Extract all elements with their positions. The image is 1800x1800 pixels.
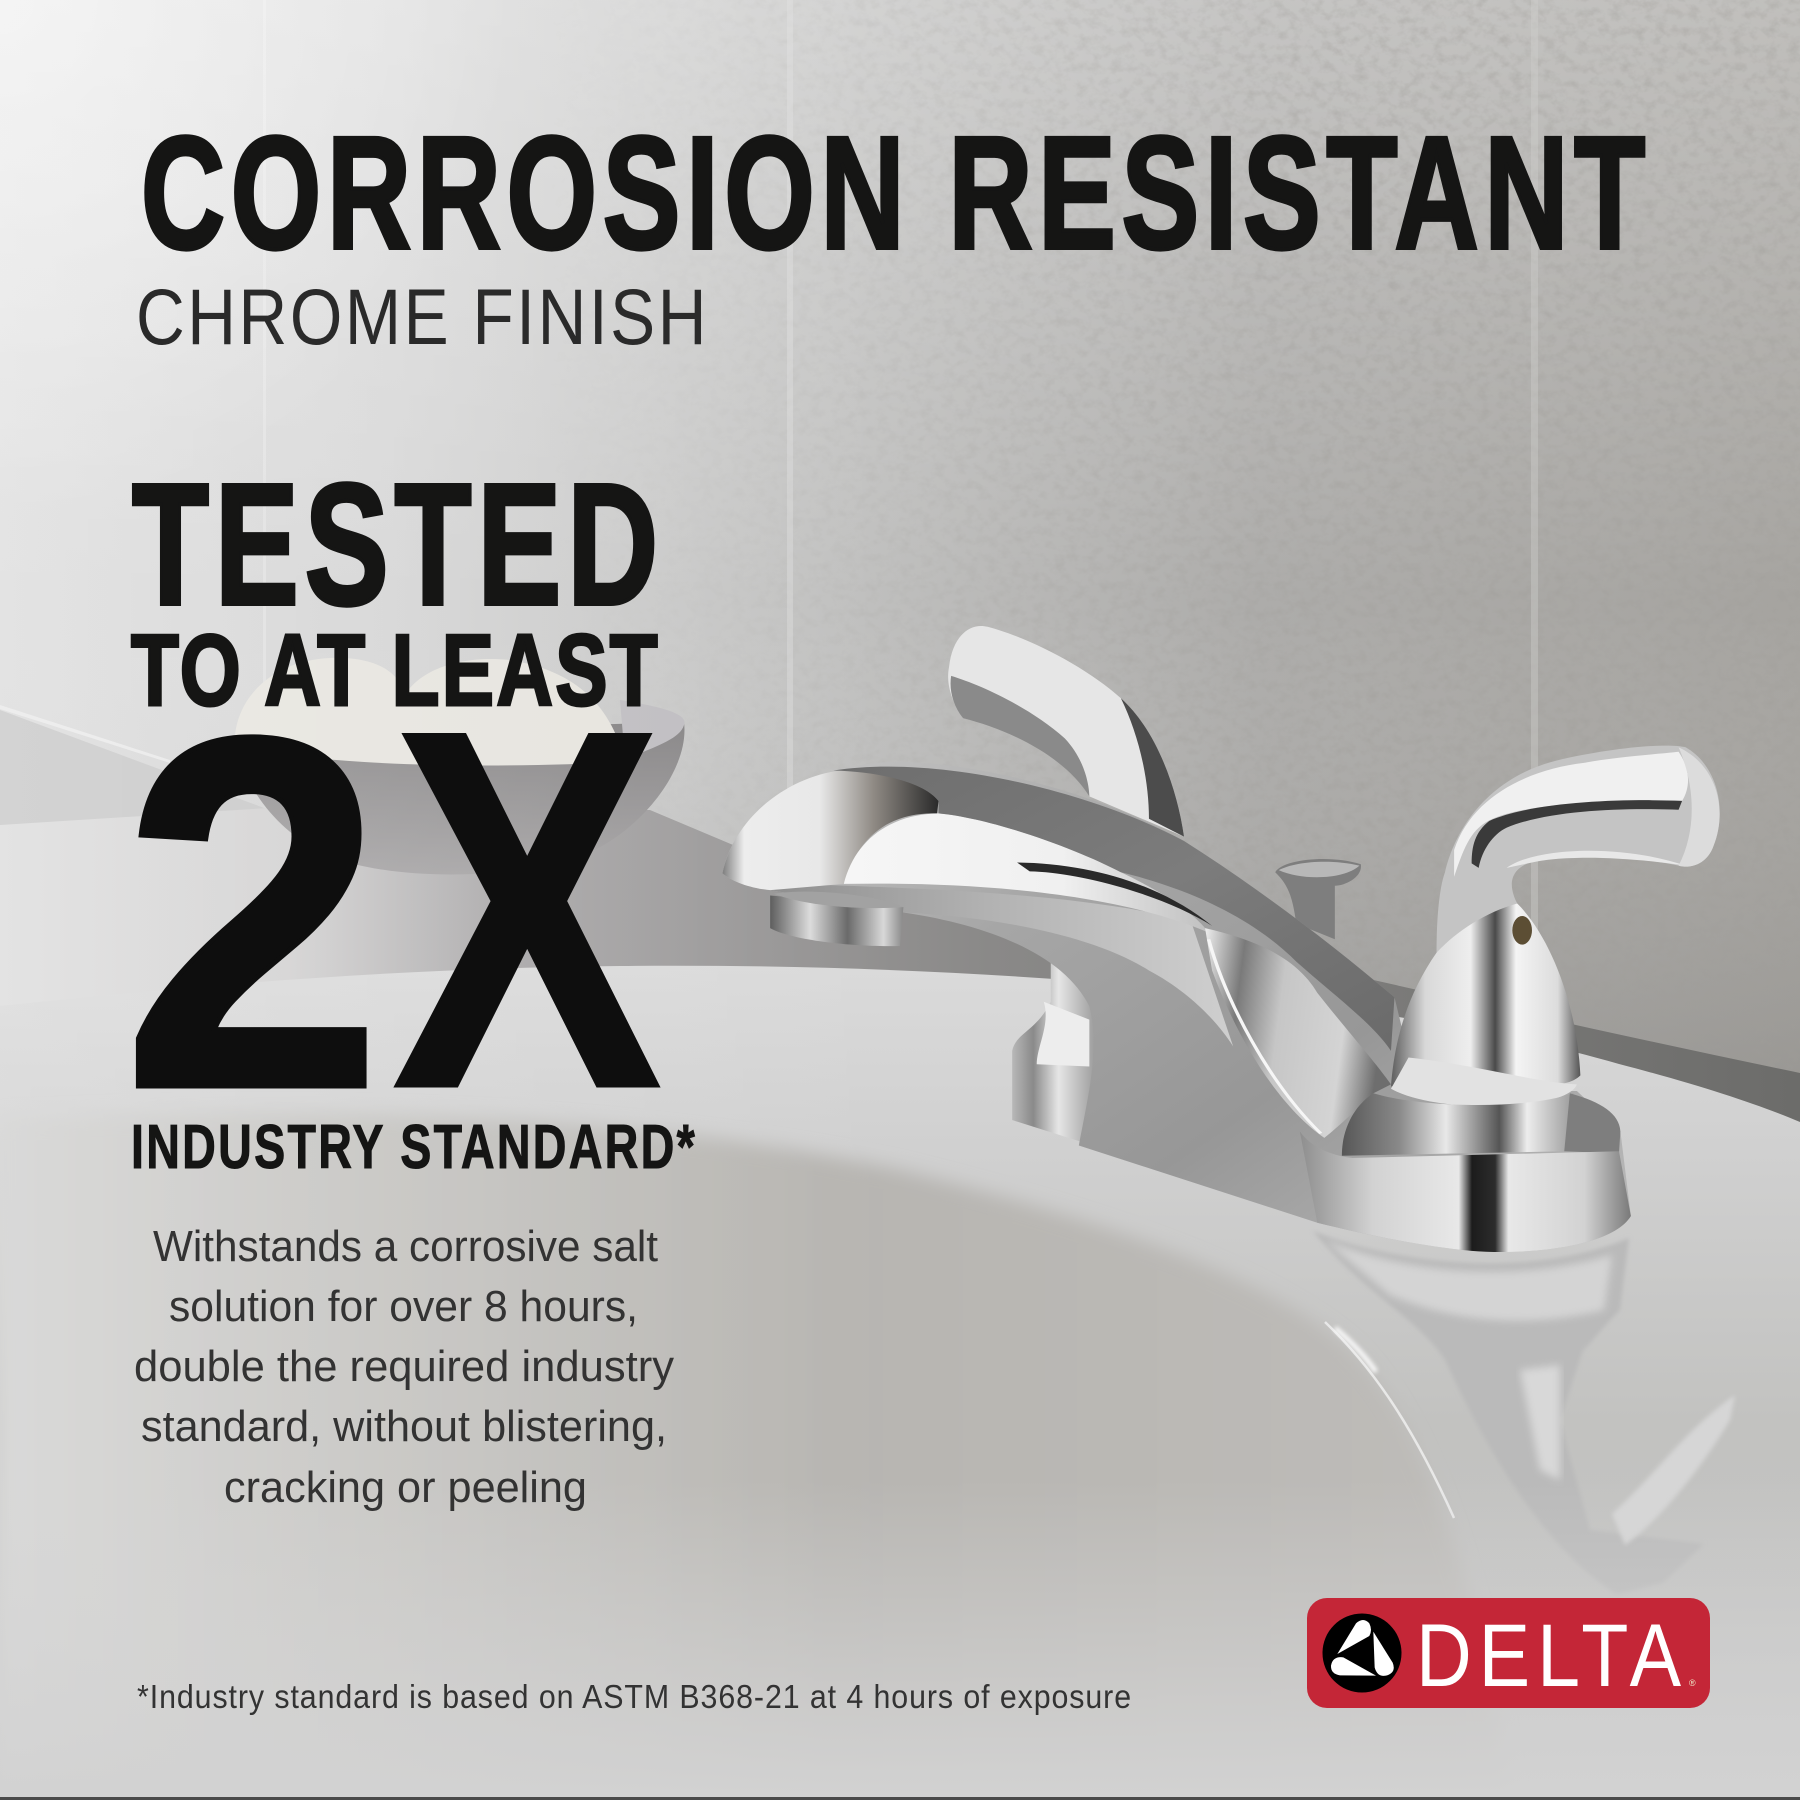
icon: pop-up knob: [1275, 859, 1361, 939]
icon: left escutcheon: [1012, 957, 1096, 1146]
countertop: [0, 806, 1800, 1220]
icon: dark slit: [1017, 862, 1212, 926]
description text: Withstands a corrosive salt: [153, 1222, 658, 1271]
icon: spout head: [722, 770, 939, 890]
soap dish: [235, 658, 685, 874]
icon: spout highlight: [844, 813, 1209, 933]
icon: curved tube: [1205, 928, 1391, 1138]
logo: Delta: [1307, 1598, 1710, 1708]
registered mark: ®: [1689, 1678, 1696, 1688]
footnote: *Industry standard is based on ASTM B368-21 at 4 hours of exposure: [137, 1678, 1132, 1715]
left light fade: [0, 0, 900, 1800]
big stat: 2X: [122, 624, 664, 1195]
bottom light fade: [0, 1480, 1800, 1800]
big stat: 2X: 2: [122, 633, 383, 1192]
icon: spout top surface: [833, 767, 1394, 1051]
icon: spout underside: [742, 881, 1233, 1046]
icon: aerator: [770, 892, 903, 946]
big stat: 2X: X: [392, 624, 664, 1195]
description text: standard, without blistering,: [141, 1402, 667, 1451]
icon: lower collar: [1342, 1093, 1573, 1156]
heading: tested: TESTED: [132, 447, 664, 641]
sink rim: [0, 966, 1800, 1800]
subtitle: CHROME FINISH: [136, 272, 709, 361]
description text: solution for over 8 hours,: [169, 1282, 638, 1331]
icon: base plate: [1300, 1093, 1631, 1252]
icon: right handle: [1437, 746, 1720, 953]
icon: tube edge highlight: [1209, 939, 1321, 1133]
heading: industry standard: INDUSTRY STANDARD*: [131, 1113, 697, 1182]
icon: right stem: [1391, 904, 1580, 1087]
icon: collar dish: [1391, 1058, 1577, 1107]
faucet reflection: [1313, 1231, 1735, 1594]
sink basin: [0, 1113, 1510, 1800]
logo wordmark: DELTA: [1416, 1605, 1688, 1705]
icon: faucet silhouette and body: [722, 762, 1631, 1252]
icon: rear handle: [948, 626, 1184, 837]
icon: Delta triangle mark: [1322, 1614, 1402, 1692]
heading: to at least: TO AT LEAST: [131, 615, 660, 727]
tiled wall: [0, 0, 1800, 1073]
icon: set screw hole: [1512, 916, 1532, 945]
faucet: [722, 626, 1720, 1252]
description text: cracking or peeling: [224, 1463, 587, 1512]
description text: double the required industry: [134, 1342, 674, 1391]
description text: [134, 1222, 674, 1512]
